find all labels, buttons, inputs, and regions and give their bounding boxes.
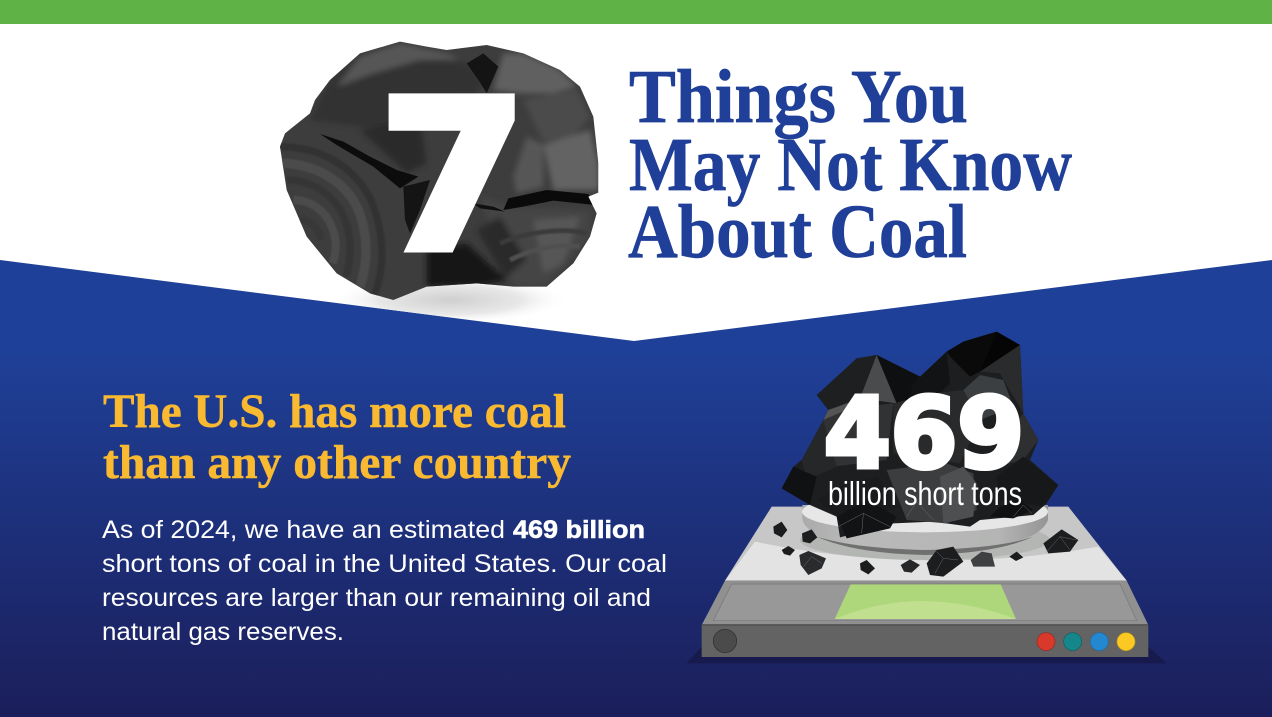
title: May Not Know xyxy=(629,123,1072,207)
power knob xyxy=(713,629,737,653)
heading xyxy=(103,385,571,489)
body text: natural gas reserves. xyxy=(102,618,344,646)
coal lump xyxy=(280,42,598,300)
white header chevron xyxy=(0,24,1272,341)
billion short tons: billion short tons xyxy=(828,475,1022,512)
body text: resources are larger than our remaining oil and xyxy=(102,584,651,612)
heading: than any other country xyxy=(103,436,571,489)
scale illustration with coal xyxy=(687,332,1167,663)
plate xyxy=(800,520,1050,560)
body text xyxy=(102,516,667,646)
number 469: 469 xyxy=(824,377,1024,490)
title: Things You xyxy=(629,55,968,139)
body text: As of 2024, we have an estimated xyxy=(102,516,505,544)
lump shadow xyxy=(338,284,542,322)
body text: 469 billion xyxy=(513,516,645,544)
loose coal pieces xyxy=(773,522,1078,577)
scale shadow xyxy=(687,647,1167,663)
coal pile xyxy=(782,332,1058,538)
number 7: 7 xyxy=(379,57,527,297)
scale display xyxy=(835,584,1016,619)
heading: The U.S. has more coal xyxy=(103,385,566,438)
scale base xyxy=(702,625,1148,657)
title: About Coal xyxy=(628,190,967,274)
scale front slope xyxy=(702,581,1148,625)
scale top xyxy=(725,507,1127,581)
cracks xyxy=(320,134,418,188)
coal lump with number 7 xyxy=(280,42,598,322)
green top bar xyxy=(0,0,1272,24)
body text: short tons of coal in the United States. Our coal xyxy=(102,550,667,578)
buttons xyxy=(1037,633,1135,651)
title xyxy=(628,55,1072,274)
growth rings xyxy=(280,147,587,297)
